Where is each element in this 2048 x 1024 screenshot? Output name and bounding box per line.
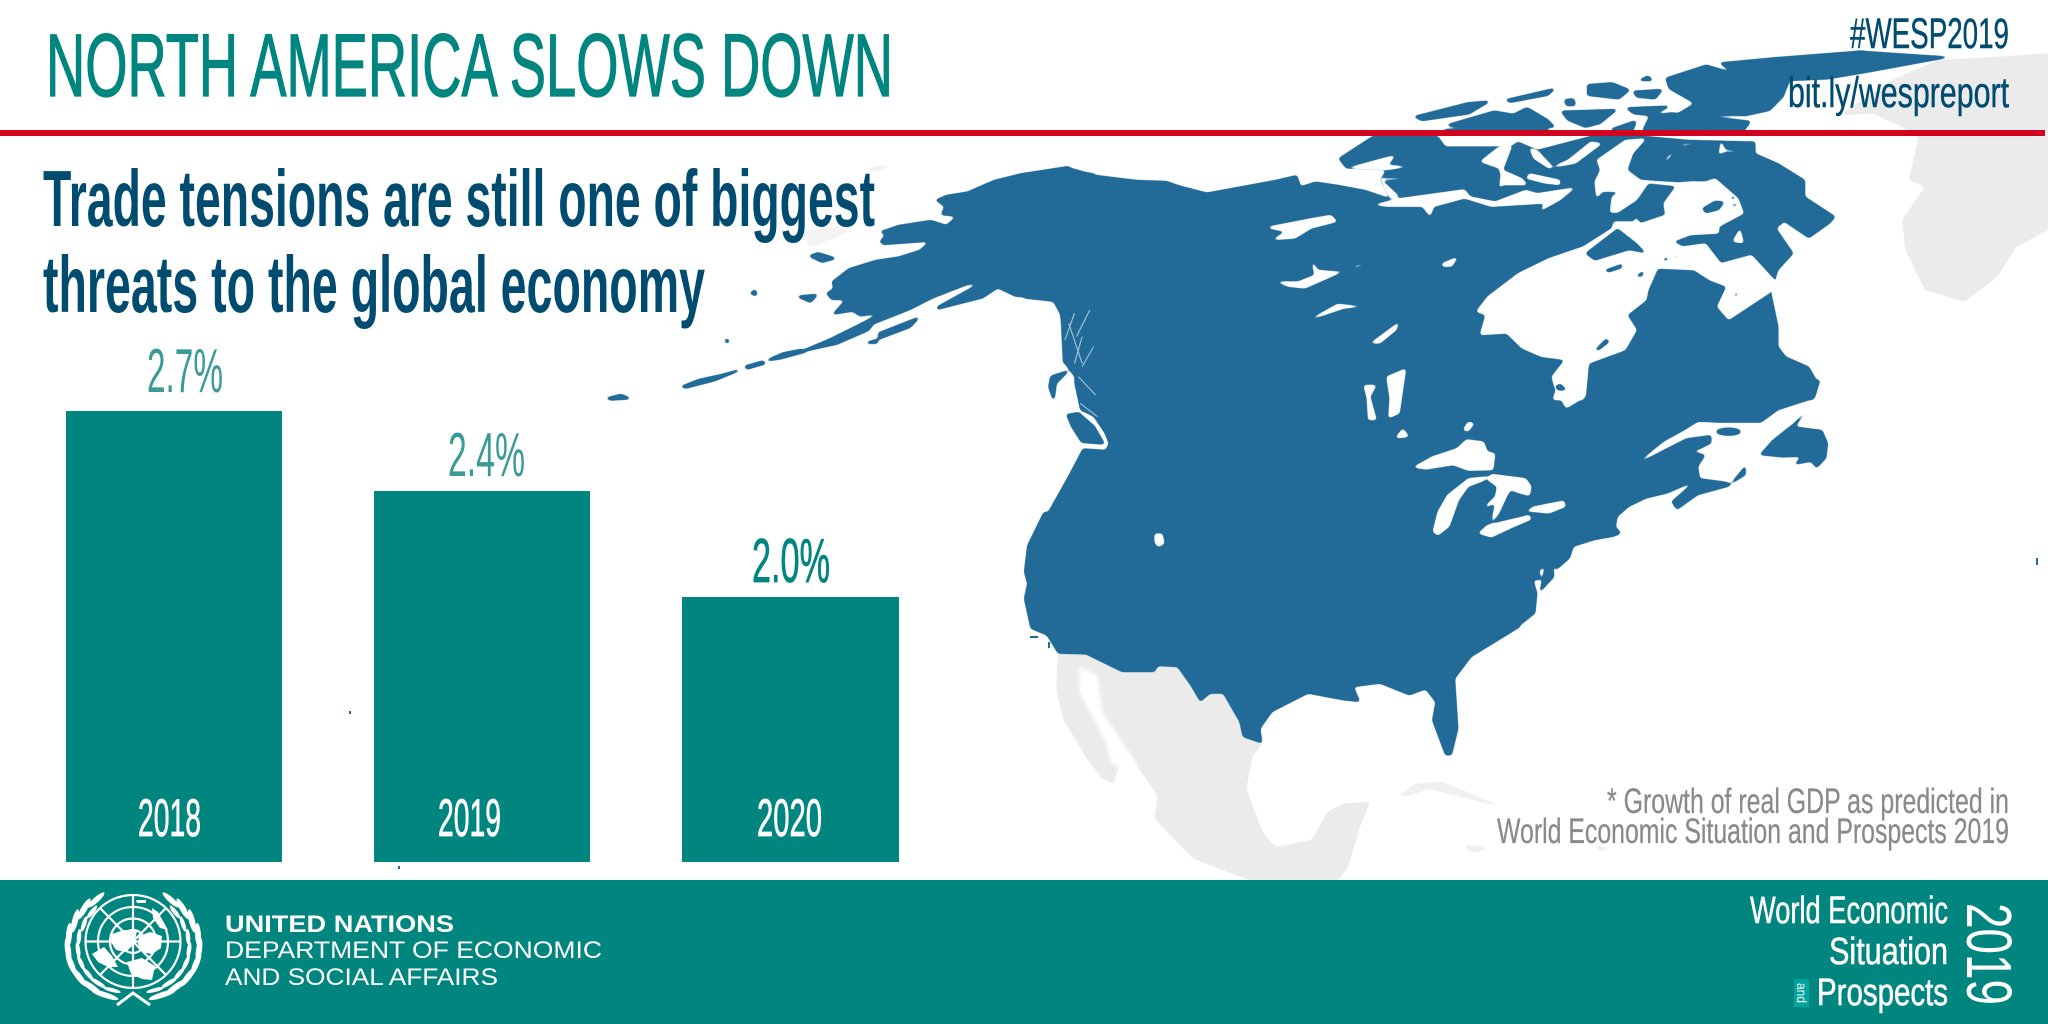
map: neighbouring land in grey — [799, 53, 2048, 880]
subtitle — [43, 154, 875, 329]
bar: 2019: 2.4% — [448, 421, 525, 490]
red header rule — [0, 130, 2045, 136]
bar: 2018: 2.7% — [147, 337, 223, 406]
map: Queen Elizabeth Islands — [1416, 52, 1945, 132]
bar: 2019 — [374, 421, 590, 862]
UN DESA wordmark: DEPARTMENT OF ECONOMIC — [225, 937, 602, 964]
bar: 2020: 2.0% — [752, 527, 830, 596]
map: Canadian lakes — [1269, 215, 1475, 438]
subtitle: threats to the global economy — [43, 240, 705, 329]
map: James Bay — [1552, 358, 1589, 408]
map: Alaskan and Pacific islands — [608, 253, 1103, 443]
crossed ribbon — [117, 993, 150, 1005]
footer band — [0, 880, 2048, 1024]
title: NORTH AMERICA SLOWS DOWN — [46, 15, 893, 115]
WESP report wordmark: World Economic — [1750, 890, 1948, 932]
bar: 2020 — [682, 527, 899, 862]
globe grid — [86, 895, 180, 988]
bar: 2018: 2018 — [138, 789, 201, 848]
map: islands inside the bays — [1554, 196, 1741, 436]
map: bays, straits and channels of the Arctic — [1155, 138, 1784, 547]
subtitle: Trade tensions are still one of biggest — [43, 154, 875, 243]
bar: 2018 — [66, 337, 282, 862]
right laurel — [146, 891, 204, 1002]
UN DESA wordmark: AND SOCIAL AFFAIRS — [225, 964, 498, 991]
map: Great Lakes — [1413, 439, 1566, 537]
bar chart: GDP growth — [66, 337, 899, 862]
map: North America — [349, 52, 2048, 880]
map: Arctic mainland and Baffin Island — [1300, 136, 1836, 400]
map: fjords of the Pacific coast — [1065, 310, 1097, 417]
icon: United Nations emblem — [63, 891, 204, 1005]
map: small pacific specks — [349, 558, 2038, 869]
WESP report wordmark: Prospects — [1817, 972, 1948, 1014]
left laurel — [63, 891, 121, 1002]
map: Newfoundland — [1759, 405, 1828, 468]
globe continents — [92, 900, 168, 980]
UN DESA wordmark: UNITED NATIONS — [225, 911, 454, 938]
bar: 2019: 2019 — [438, 789, 501, 848]
WESP report wordmark: Situation — [1829, 931, 1948, 973]
and tag: and — [1794, 983, 1810, 1003]
WESP report wordmark — [1750, 890, 2025, 1014]
map: United States and Canada landmass — [608, 52, 1945, 755]
UN DESA wordmark — [225, 911, 602, 991]
footnote — [1497, 782, 2009, 851]
bar: 2020: 2020 — [757, 789, 822, 848]
map: Great Salt Lake — [1155, 534, 1164, 547]
